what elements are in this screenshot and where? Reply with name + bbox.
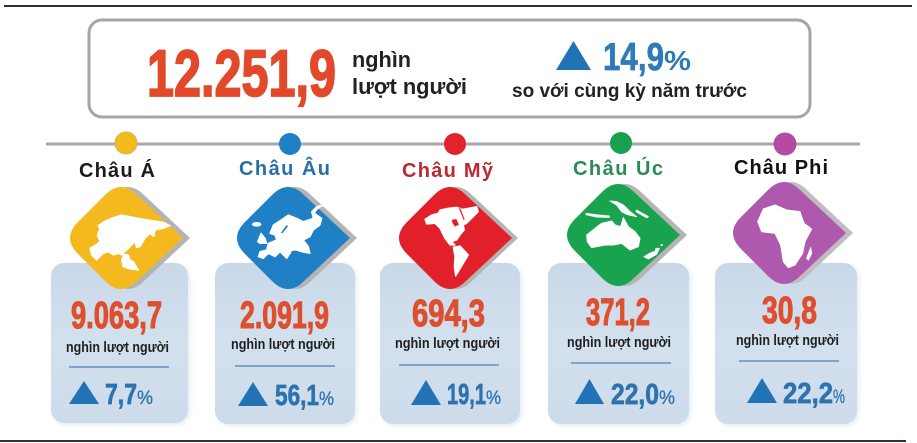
timeline dot [115,132,137,154]
panel: Châu Á [51,132,190,425]
percent sign: % [664,45,691,76]
percent: % [486,388,501,409]
icon: up triangle [747,378,777,403]
panel: Châu Úc [548,132,691,426]
percent: % [319,389,334,410]
unit: nghìn lượt người [736,333,839,349]
heading: Châu Phi [734,157,828,179]
card [548,263,691,426]
growth: 22,2 [783,378,833,410]
icon: up triangle [238,382,268,406]
heading: Châu Úc [573,156,663,180]
timeline dot [444,133,466,155]
card [51,263,190,425]
icon: up triangle [556,41,591,70]
value: 30,8 [762,290,817,332]
total unit: nghìn [352,47,411,72]
icon: Africa map [733,182,853,284]
total value: 12.251,9 [147,36,336,110]
timeline dot [279,133,301,155]
growth: 19,1 [447,379,486,411]
panel: Châu Mỹ [380,133,522,426]
icon: Asia map [70,187,190,289]
heading: Châu Âu [239,156,330,180]
value: 2.091,9 [240,295,329,337]
timeline dot [774,132,796,156]
value: 9.063,7 [71,295,162,337]
unit: nghìn lượt người [231,337,335,353]
growth: 22,0 [611,379,659,411]
icon: up triangle [575,379,604,404]
heading: Châu Á [79,159,155,182]
panel: Châu Âu [215,133,357,426]
value: 694,3 [412,293,485,335]
growth: 7,7 [105,379,137,411]
card [380,263,522,426]
panel: Châu Phi [715,132,859,426]
icon: Europe map [237,187,357,289]
percent: % [137,388,153,409]
card [715,263,859,426]
card [215,263,357,426]
icon: Oceania map [567,184,687,286]
timeline dot [610,132,632,154]
percent: % [659,388,675,409]
growth: 56,1 [275,380,319,412]
panel: total summary [89,20,810,117]
timeline line [46,142,860,146]
percent: % [833,387,845,408]
comparison note: so với cùng kỳ năm trước [512,81,747,102]
unit: nghìn lượt người [66,340,169,356]
total growth: 14,9 [603,36,664,79]
total unit second line: lượt người [352,74,467,99]
heading: Châu Mỹ [402,160,494,182]
unit: nghìn lượt người [395,336,500,352]
unit: nghìn lượt người [567,335,671,351]
icon: up triangle [69,381,99,404]
icon: up triangle [411,380,441,405]
icon: Americas map [399,187,518,289]
value: 371,2 [586,292,650,334]
